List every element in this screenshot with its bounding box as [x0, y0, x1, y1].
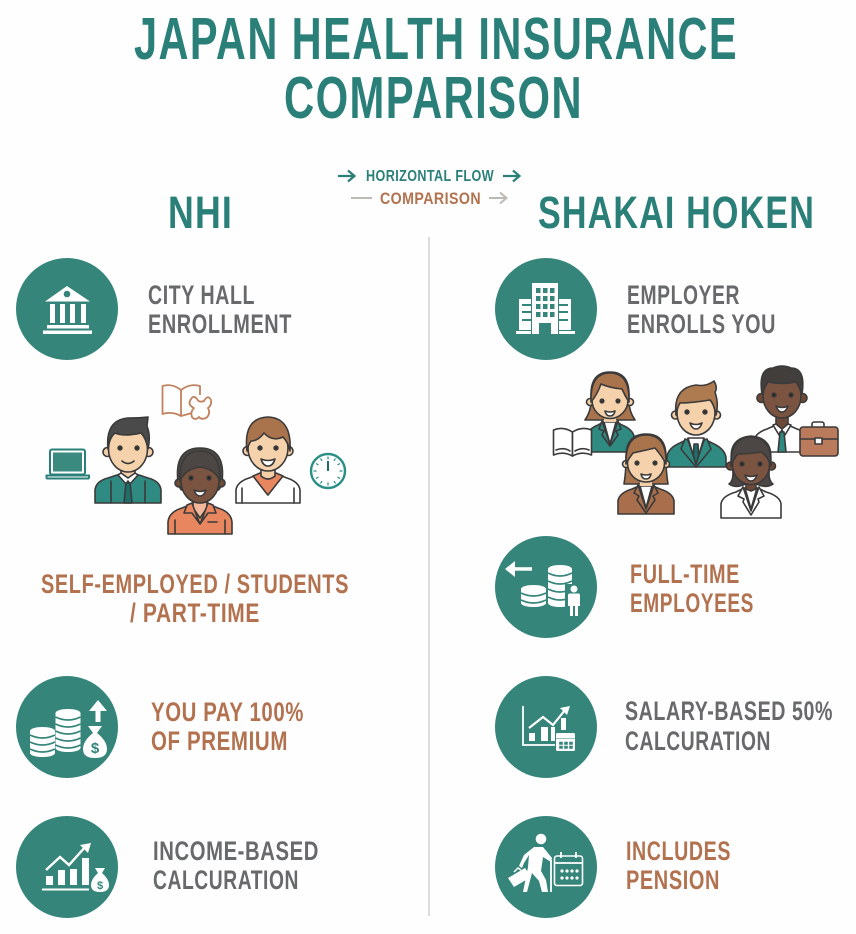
- horizontal flow label: HORIZONTAL FLOW: [366, 168, 494, 185]
- text: salary-based 50% calculation: [625, 696, 833, 756]
- text: employer enrolls you: EMPLOYER: [627, 280, 740, 310]
- person: dark-skinned man in white shirt: [754, 366, 810, 452]
- icon: coins and money bag: $: [91, 740, 100, 757]
- text: self-employed students part-time: [41, 569, 349, 628]
- person: dark-skinned student in orange: [168, 448, 232, 534]
- text: you pay 100% of premium: YOU PAY 100%: [151, 697, 304, 727]
- person: woman in teal blazer: [585, 372, 635, 452]
- icon: clock: [311, 454, 345, 488]
- icon: briefcase: [800, 422, 838, 456]
- text: salary-based 50% calculation: CALCURATION: [625, 726, 771, 756]
- text: includes pension: PENSION: [626, 865, 720, 895]
- text: income-based calculation: INCOME-BASED: [153, 836, 319, 866]
- text: city hall enrollment: [148, 280, 292, 339]
- icon: office building: [495, 258, 597, 360]
- icon: book and puzzle: [162, 385, 211, 419]
- icon: salary chart with calendar: [495, 676, 597, 778]
- text: full-time employees: FULL-TIME: [630, 559, 740, 589]
- person: man in teal shirt: [95, 417, 161, 503]
- person: woman in brown blazer: [618, 434, 674, 514]
- text: you pay 100% of premium: OF PREMIUM: [151, 726, 288, 756]
- person: man in teal suit: [667, 381, 726, 467]
- text: income-based calculation: [153, 836, 319, 895]
- panel: Shakai Hoken column: [495, 258, 838, 918]
- text: full-time employees: [630, 559, 754, 618]
- text: employer enrolls you: ENROLLS YOU: [627, 309, 776, 339]
- icon: income chart: $: [97, 880, 103, 892]
- icon: open book: [554, 428, 592, 456]
- icon: laptop: [46, 450, 89, 478]
- illustration: NHI people: [46, 385, 345, 534]
- icon: coins and money bag: [16, 676, 118, 778]
- title: COMPARISON: [284, 65, 583, 131]
- horizontal flow label: [338, 168, 520, 208]
- horizontal flow label: COMPARISON: [380, 189, 481, 208]
- text: employer enrolls you: [627, 280, 776, 339]
- person: woman in white shirt: [236, 417, 300, 503]
- text: city hall enrollment: ENROLLMENT: [148, 309, 292, 339]
- text: includes pension: [626, 836, 731, 895]
- text: income-based calculation: CALCURATION: [153, 865, 299, 895]
- title: [134, 6, 738, 131]
- icon: income chart: [16, 816, 118, 918]
- text: city hall enrollment: CITY HALL: [148, 280, 255, 310]
- text: self-employed students part-time: SELF-EMPLOYED / STUDENTS: [41, 569, 349, 599]
- text: self-employed students part-time: / PART-TIME: [130, 598, 260, 628]
- icon: coins and employee: [495, 536, 597, 638]
- panel: NHI column: [16, 258, 349, 918]
- illustration: employees group: [554, 366, 838, 518]
- text: full-time employees: EMPLOYEES: [630, 588, 754, 618]
- person: dark-skinned woman in white coat: [721, 436, 781, 518]
- text: includes pension: INCLUDES: [626, 836, 731, 866]
- text: you pay 100% of premium: [151, 697, 304, 756]
- icon: walking retiree with calendar: [495, 816, 597, 918]
- heading: NHI: NHI: [168, 187, 233, 238]
- icon: city hall: [16, 258, 118, 360]
